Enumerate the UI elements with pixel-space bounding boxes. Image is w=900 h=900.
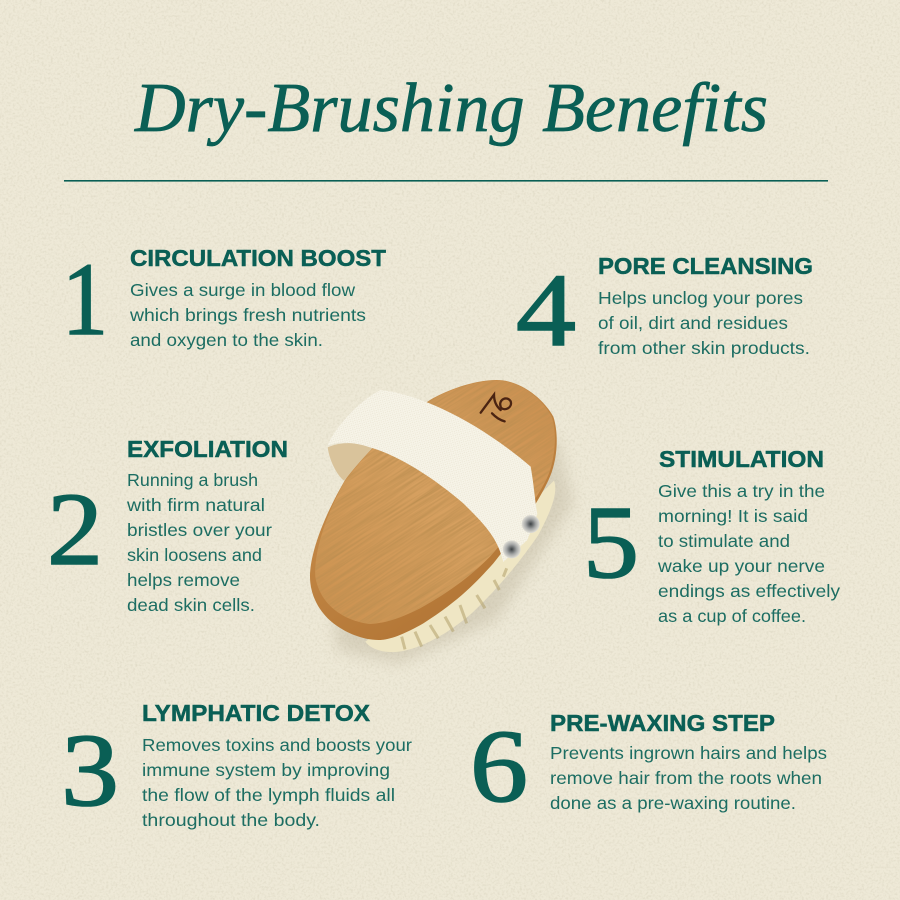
body text: Removes toxins and boosts your [142, 735, 412, 755]
body text: immune system by improving [142, 760, 390, 780]
title: Dry-Brushing Benefits [134, 70, 768, 147]
number 3: 3 [61, 713, 119, 828]
body text: Running a brush [127, 470, 258, 490]
body text: to stimulate and [658, 531, 790, 551]
heading: EXFOLIATION [127, 436, 288, 462]
body text: bristles over your [127, 520, 272, 540]
strap back loop [328, 443, 373, 481]
body text: done as a pre-waxing routine. [550, 793, 796, 813]
body text: endings as effectively [658, 581, 840, 601]
body text: the flow of the lymph fluids all [142, 785, 395, 805]
body text: Helps unclog your pores [598, 288, 803, 308]
heading: PORE CLEANSING [598, 253, 813, 279]
number 4: 4 [516, 253, 576, 368]
body text: skin loosens and [127, 545, 262, 565]
logo mark [481, 395, 511, 421]
benefit 6: pre-waxing step [470, 709, 827, 824]
body text: Prevents ingrown hairs and helps [550, 743, 827, 763]
body text: and oxygen to the skin. [130, 330, 323, 350]
heading: STIMULATION [659, 446, 824, 472]
brush illustration [310, 380, 575, 665]
body text [126, 470, 272, 615]
body text [657, 481, 840, 626]
heading: LYMPHATIC DETOX [142, 700, 371, 726]
body text: with firm natural [126, 495, 265, 515]
body text: helps remove [127, 570, 240, 590]
number 6: 6 [470, 709, 528, 824]
body text: Give this a try in the [658, 481, 825, 501]
heading: CIRCULATION BOOST [130, 245, 386, 271]
benefit 5: stimulation [583, 446, 840, 626]
body text: wake up your nerve [657, 556, 825, 576]
body text [550, 743, 827, 813]
benefit 1: circulation boost [62, 242, 386, 357]
body text: morning! It is said [658, 506, 808, 526]
benefit 2: exfoliation [47, 436, 288, 615]
heading: PRE-WAXING STEP [550, 710, 775, 736]
number 2: 2 [47, 472, 103, 587]
body text [598, 288, 810, 358]
body text: which brings fresh nutrients [129, 305, 366, 325]
body text: Gives a surge in blood flow [130, 280, 355, 300]
body text: dead skin cells. [127, 595, 255, 615]
wood body [310, 380, 557, 640]
cotton strap [328, 390, 537, 562]
body text: remove hair from the roots when [550, 768, 822, 788]
body text: from other skin products. [598, 338, 810, 358]
benefit 3: lymphatic detox [61, 700, 412, 830]
body text: as a cup of coffee. [658, 606, 806, 626]
body text: of oil, dirt and residues [598, 313, 788, 333]
bristles [365, 481, 555, 652]
body text [129, 280, 366, 350]
body text: throughout the body. [142, 810, 320, 830]
number 5: 5 [583, 485, 639, 600]
number 1: 1 [62, 242, 108, 357]
body text [142, 735, 412, 830]
benefit 4: pore cleansing [516, 253, 813, 368]
rivets [503, 515, 540, 558]
soft shadow [330, 437, 573, 663]
